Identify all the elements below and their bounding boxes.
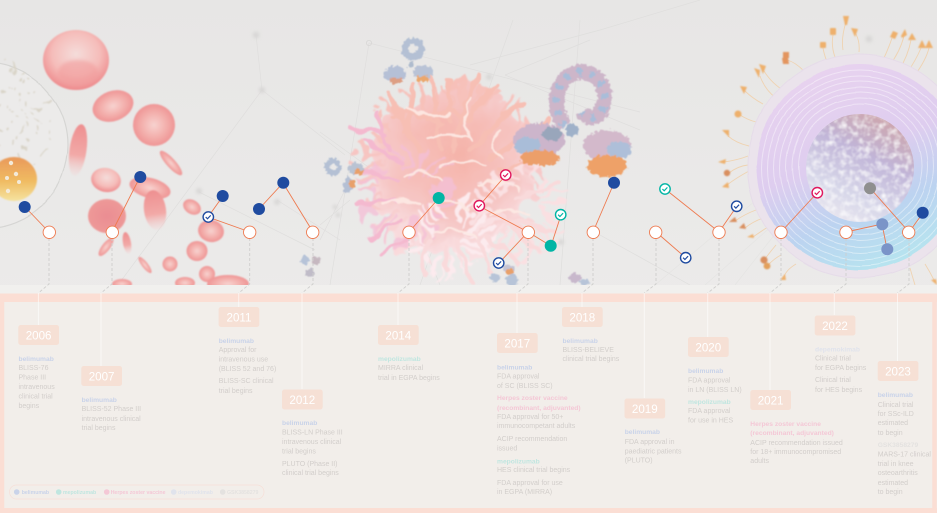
milestone 2021 (750, 390, 843, 465)
milestone 2023: osteoarthritis (878, 470, 918, 477)
milestone 2023: belimumab (878, 392, 913, 399)
milestone 2006: begins (18, 403, 40, 410)
legend: belimumab (22, 490, 49, 496)
milestone 2011: (BLISS 52 and 76) (219, 366, 276, 373)
timeline connectors (38, 238, 909, 398)
milestone 2006: Phase III (18, 375, 46, 382)
milestone 2023: estimated (878, 480, 908, 487)
milestone 2023: GSK3858279 (878, 442, 919, 449)
milestone 2021: 2021 (758, 394, 783, 407)
milestone 2017: in EGPA (MIRRA) (497, 489, 552, 496)
milestone 2019 (624, 398, 682, 465)
milestone 2012: PLUTO (Phase II) (282, 461, 338, 468)
milestone 2006: intravenous (18, 384, 55, 391)
milestone 2007 (81, 366, 141, 432)
large antibody (513, 72, 631, 177)
milestone 2021: for 18+ immunocompromised (750, 449, 841, 456)
milestone 2021: adults (750, 458, 769, 465)
milestone 2023: trial in knee (878, 461, 914, 468)
milestone 2020: FDA approval (688, 377, 731, 384)
legend: GSK3858279 (227, 490, 259, 496)
node ring (366, 40, 372, 46)
milestone 2022: Clinical trial (815, 377, 851, 384)
milestone 2023: for SSc-ILD (878, 411, 914, 418)
panel: timeline text frame (2, 298, 934, 510)
milestone 2019: FDA approval in (625, 439, 675, 446)
textured sphere (806, 114, 914, 222)
milestone 2012: 2012 (289, 394, 315, 407)
milestone 2012: trial begins (282, 448, 316, 455)
milestone 2006: BLISS-76 (18, 365, 49, 372)
milestone 2007: BLISS-52 Phase III (82, 406, 141, 413)
nucleus (0, 157, 37, 201)
milestone 2014: 2014 (385, 329, 412, 342)
pink immune cell (350, 72, 560, 282)
milestone 2017: FDA approval for use (497, 480, 563, 487)
milestone 2014: MIRRA clinical (378, 365, 424, 372)
orange spikes (718, 16, 937, 285)
milestone 2012: BLISS-LN Phase III (282, 430, 343, 437)
milestone 2019: paediatric patients (625, 448, 682, 455)
milestone 2012: intravenous clinical (282, 439, 342, 446)
milestone 2023: to begin (878, 430, 903, 437)
milestone 2017: FDA approval (497, 373, 540, 380)
milestone 2007: belimumab (82, 397, 117, 404)
milestone 2017 (497, 333, 581, 496)
milestone 2021: ACIP recommendation issued (750, 440, 843, 447)
milestone 2006: clinical trial (18, 394, 53, 401)
milestone 2022 (815, 316, 867, 394)
milestone 2020: for use in HES (688, 418, 733, 425)
milestone 2006: belimumab (18, 356, 54, 363)
milestone 2021: Herpes zoster vaccine (750, 421, 821, 428)
milestone 2022: for EGPA begins (815, 365, 867, 372)
milestone 2011: BLISS-SC clinical (219, 378, 274, 385)
milestone 2018: clinical trial begins (562, 356, 620, 363)
milestone 2017: belimumab (497, 364, 532, 371)
milestone 2023: Clinical trial (878, 402, 914, 409)
milestone 2023: to begin (878, 489, 903, 496)
network lines (122, 2, 693, 285)
milestone 2018: belimumab (562, 338, 598, 345)
milestone 2022: depemokimab (815, 346, 860, 353)
milestone 2020 (688, 337, 742, 425)
milestone 2020: in LN (BLISS LN) (688, 387, 742, 394)
milestone 2011 (219, 307, 276, 395)
milestone 2017: Herpes zoster vaccine (497, 395, 568, 402)
milestone 2014: trial in EGPA begins (378, 375, 440, 382)
milestone 2017: immunocompetant adults (497, 423, 576, 430)
milestone 2017: 2017 (504, 337, 530, 350)
milestone 2020: belimumab (688, 368, 723, 375)
milestone 2011: belimumab (219, 338, 254, 345)
milestone 2017: (recombinant, adjuvanted) (497, 405, 581, 412)
milestone 2007: 2007 (89, 370, 114, 383)
milestone 2011: 2011 (227, 311, 251, 324)
milestone 2020: mepolizumab (688, 399, 731, 406)
milestone check icons (203, 170, 823, 268)
milestone 2023: 2023 (885, 365, 911, 378)
milestone 2014: mepolizumab (378, 356, 421, 363)
milestone 2007: trial begins (82, 425, 116, 432)
lower band (0, 285, 937, 294)
milestone 2011: trial begins (219, 388, 253, 395)
milestone 2019: belimumab (625, 429, 660, 436)
milestone 2021: (recombinant, adjuvanted) (750, 430, 834, 437)
purple disc (748, 54, 937, 278)
network nodes (196, 32, 872, 245)
legend (10, 485, 264, 499)
milestone 2022: 2022 (822, 320, 848, 333)
milestone 2017: FDA approval for 50+ (497, 414, 563, 421)
milestone link lines (25, 175, 923, 263)
milestone 2019: (PLUTO) (625, 458, 653, 465)
milestone 2011: intravenous use (219, 356, 268, 363)
milestone 2017: HES clinical trial begins (497, 467, 571, 474)
milestone 2018: BLISS-BELIEVE (562, 347, 614, 354)
milestone 2022: Clinical trial (815, 356, 851, 363)
milestone 2014 (378, 325, 440, 382)
legend: mepolizumab (63, 490, 96, 496)
milestone 2006 (18, 325, 59, 410)
milestone 2023: MARS-17 clinical (878, 451, 931, 458)
legend: depemokimab (178, 490, 213, 496)
milestone 2018 (562, 307, 620, 363)
milestone 2012 (282, 390, 343, 477)
legend: Herpes zoster vaccine (111, 490, 166, 496)
milestone 2017: of SC (BLISS SC) (497, 383, 553, 390)
milestone 2007: intravenous clinical (82, 416, 141, 423)
small antibodies (300, 41, 590, 286)
milestone 2017: mepolizumab (497, 458, 540, 465)
milestone 2019: 2019 (632, 403, 658, 416)
milestone 2011: Approval for (219, 347, 257, 354)
milestone dots (19, 171, 929, 255)
milestone 2023 (878, 361, 931, 496)
milestone 2012: belimumab (282, 420, 317, 427)
panel: molecular artwork (0, 0, 937, 293)
milestone 2020: 2020 (695, 341, 721, 354)
milestone 2018: 2018 (569, 311, 595, 324)
left translucent cell (0, 62, 68, 228)
milestone 2023: estimated (878, 420, 908, 427)
milestone 2006: 2006 (26, 329, 51, 342)
milestone 2017: issued (497, 445, 517, 452)
timeline nodes (43, 226, 915, 238)
milestone 2012: clinical trial begins (282, 470, 339, 477)
red blood cells (43, 30, 249, 293)
milestone 2022: for HES begins (815, 387, 863, 394)
milestone 2017: ACIP recommendation (497, 436, 567, 443)
milestone 2020: FDA approval (688, 408, 731, 415)
